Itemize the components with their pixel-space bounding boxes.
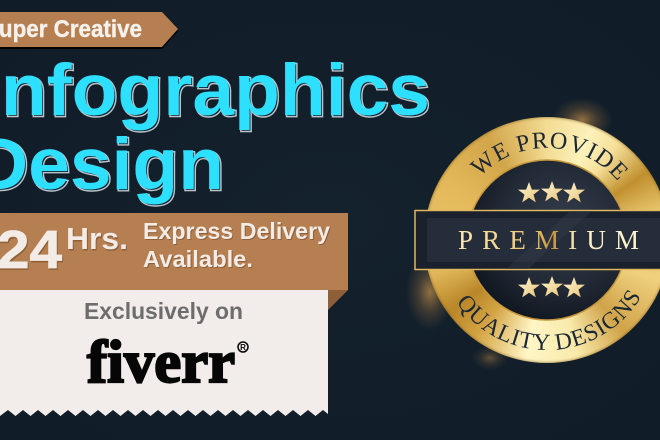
Hrs. label: Hrs. [67,222,129,258]
bottom arc text: QUALITY DESIGNS [459,290,640,350]
banner fold [328,290,348,310]
glow behind the ring [408,100,609,368]
top arc text: WE PROVIDE [469,132,628,180]
express delivery text: Express Delivery [143,218,330,244]
Hrs. label: Hrs. [66,221,128,256]
express delivery text [143,218,331,273]
express delivery text: Available. [143,246,253,272]
paper panel with serrated edge [0,290,328,416]
express delivery text: Express Delivery [144,219,331,245]
gold ring [424,117,660,363]
title: Infographics Design [0,50,432,206]
dark inner disc [467,160,627,320]
ribbon: Super Creative [0,12,178,49]
top stars [518,181,585,202]
PREMIUM text: PREMIUM [458,225,639,255]
express delivery text: Available. [144,247,254,273]
fiverr logo: R [240,343,246,352]
delivery banner [0,213,348,290]
Exclusively on: Exclusively on [84,298,243,324]
premium band [415,210,660,270]
bottom stars [518,276,585,297]
premium badge [408,100,660,368]
fiverr logo: fiverr [87,329,235,395]
